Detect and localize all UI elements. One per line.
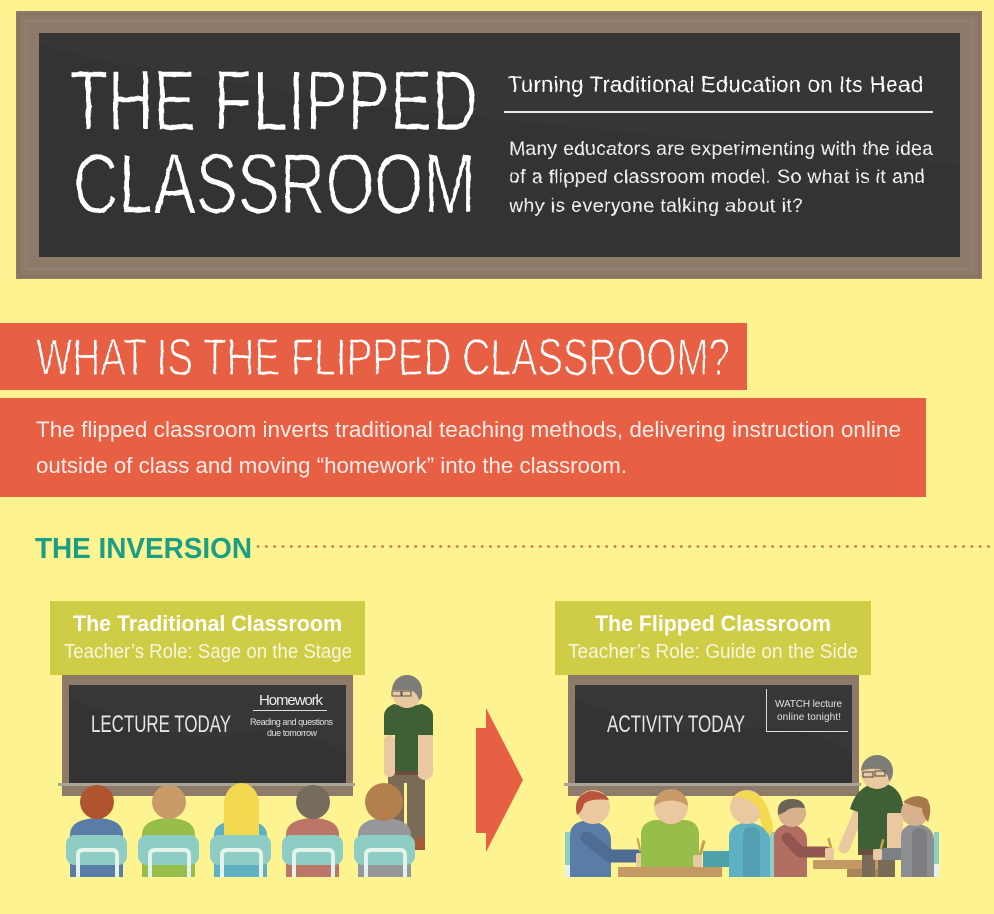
figure: student in green — [637, 789, 706, 867]
label: traditional classroom: The Traditional Classroom — [73, 611, 342, 636]
banner: section heading: WHAT IS THE FLIPPED CLASSROOM? — [36, 329, 730, 387]
heading: the inversion: THE INVERSION — [35, 533, 252, 565]
table: left — [618, 867, 722, 877]
banner: definition text — [0, 398, 926, 497]
title — [69, 54, 478, 232]
figure: student 1 — [66, 785, 127, 877]
chalkboard: lecture today: LECTURE TODAY — [91, 711, 231, 738]
intro text — [508, 138, 933, 217]
figure: student 3 — [210, 783, 271, 877]
figure: student 4 — [282, 785, 343, 877]
figure: student 2 — [138, 785, 199, 877]
chalkboard: activity today — [564, 675, 861, 796]
chalkboard: activity today: online tonight! — [777, 712, 841, 723]
label: traditional classroom: Teacher’s Role: Sage on the Stage — [64, 641, 352, 663]
panel: traditional classroom — [50, 601, 433, 877]
figure: student in grey — [873, 796, 939, 877]
figure: student 5 — [354, 783, 415, 877]
figure: standing teacher — [384, 675, 433, 850]
chalkboard: activity today: WATCH lecture — [775, 699, 842, 710]
figure: student in red — [774, 799, 834, 877]
figure: student in teal — [703, 790, 775, 877]
banner: definition text: outside of class and moving “homework” into the classroom. — [36, 453, 627, 478]
label: flipped classroom — [555, 601, 871, 675]
table: right — [813, 860, 895, 877]
figure: standing teacher helping — [844, 755, 903, 877]
chalkboard: lecture today: Homework — [259, 692, 324, 709]
panel: flipped classroom — [555, 601, 939, 877]
arrow — [476, 708, 523, 852]
label: flipped classroom: The Flipped Classroom — [595, 611, 831, 636]
chalkboard: lecture today: Reading and questions — [250, 717, 334, 727]
title: CLASSROOM — [73, 137, 476, 232]
chalkboard: lecture today — [58, 675, 355, 796]
intro text: Many educators are experimenting with the idea — [509, 138, 933, 160]
panel: chalkboard header — [16, 11, 982, 279]
chalkboard: activity today: ACTIVITY TODAY — [607, 711, 745, 738]
banner: section heading — [0, 323, 747, 390]
intro text: of a flipped classroom model. So what is it and — [509, 166, 925, 188]
label: traditional classroom — [50, 601, 365, 675]
banner: definition text: The flipped classroom inverts traditional teaching methods, delivering instruction online — [36, 417, 901, 442]
subtitle: Turning Traditional Education on Its Head — [508, 72, 923, 97]
intro text: why is everyone talking about it? — [508, 195, 803, 217]
label: flipped classroom: Teacher’s Role: Guide on the Side — [568, 641, 858, 663]
chalkboard: lecture today: due tomorrow — [267, 728, 318, 738]
figure: student in blue — [565, 790, 647, 877]
title: THE FLIPPED — [69, 54, 478, 149]
